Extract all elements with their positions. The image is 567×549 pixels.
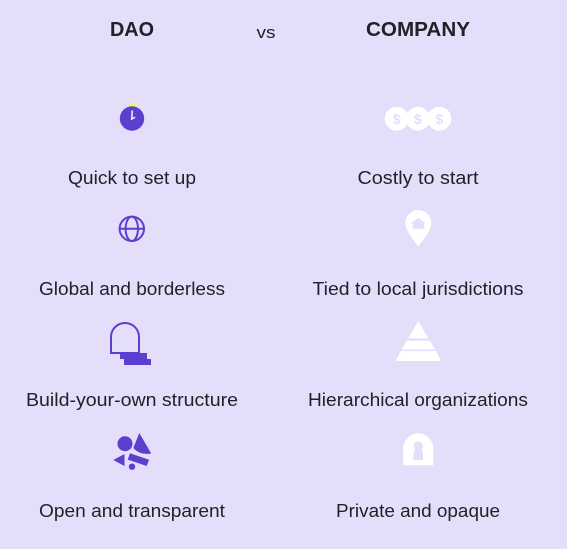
icon: coins: $ [414,111,422,127]
icon: keyhole arch [403,433,433,465]
icon: arch with steps [111,323,151,365]
label: build-your-own structure: Build-your-own structure [26,390,238,410]
label: global and borderless: Global and borderless [39,279,225,299]
label: private and opaque: Private and opaque [336,501,500,521]
icon: globe [120,217,144,241]
label: hierarchical organizations: Hierarchical organizations [308,390,528,410]
heading: vs: vs [256,23,276,42]
icon: pyramid [396,321,441,361]
label: costly to start: Costly to start [358,168,478,188]
heading: DAO: DAO [110,19,154,41]
icon: scattered shapes [113,433,151,470]
icon: location pin [405,210,431,247]
heading: COMPANY: COMPANY [366,19,471,41]
icon: coins: $ [393,111,401,127]
icon: stopwatch [120,104,144,131]
label: quick to set up: Quick to set up [68,168,196,188]
label: open and transparent: Open and transparent [39,501,225,521]
icon: coins [385,107,451,131]
icon: coins: $ [435,111,443,127]
label: tied to local jurisdictions: Tied to local jurisdictions [312,279,524,299]
